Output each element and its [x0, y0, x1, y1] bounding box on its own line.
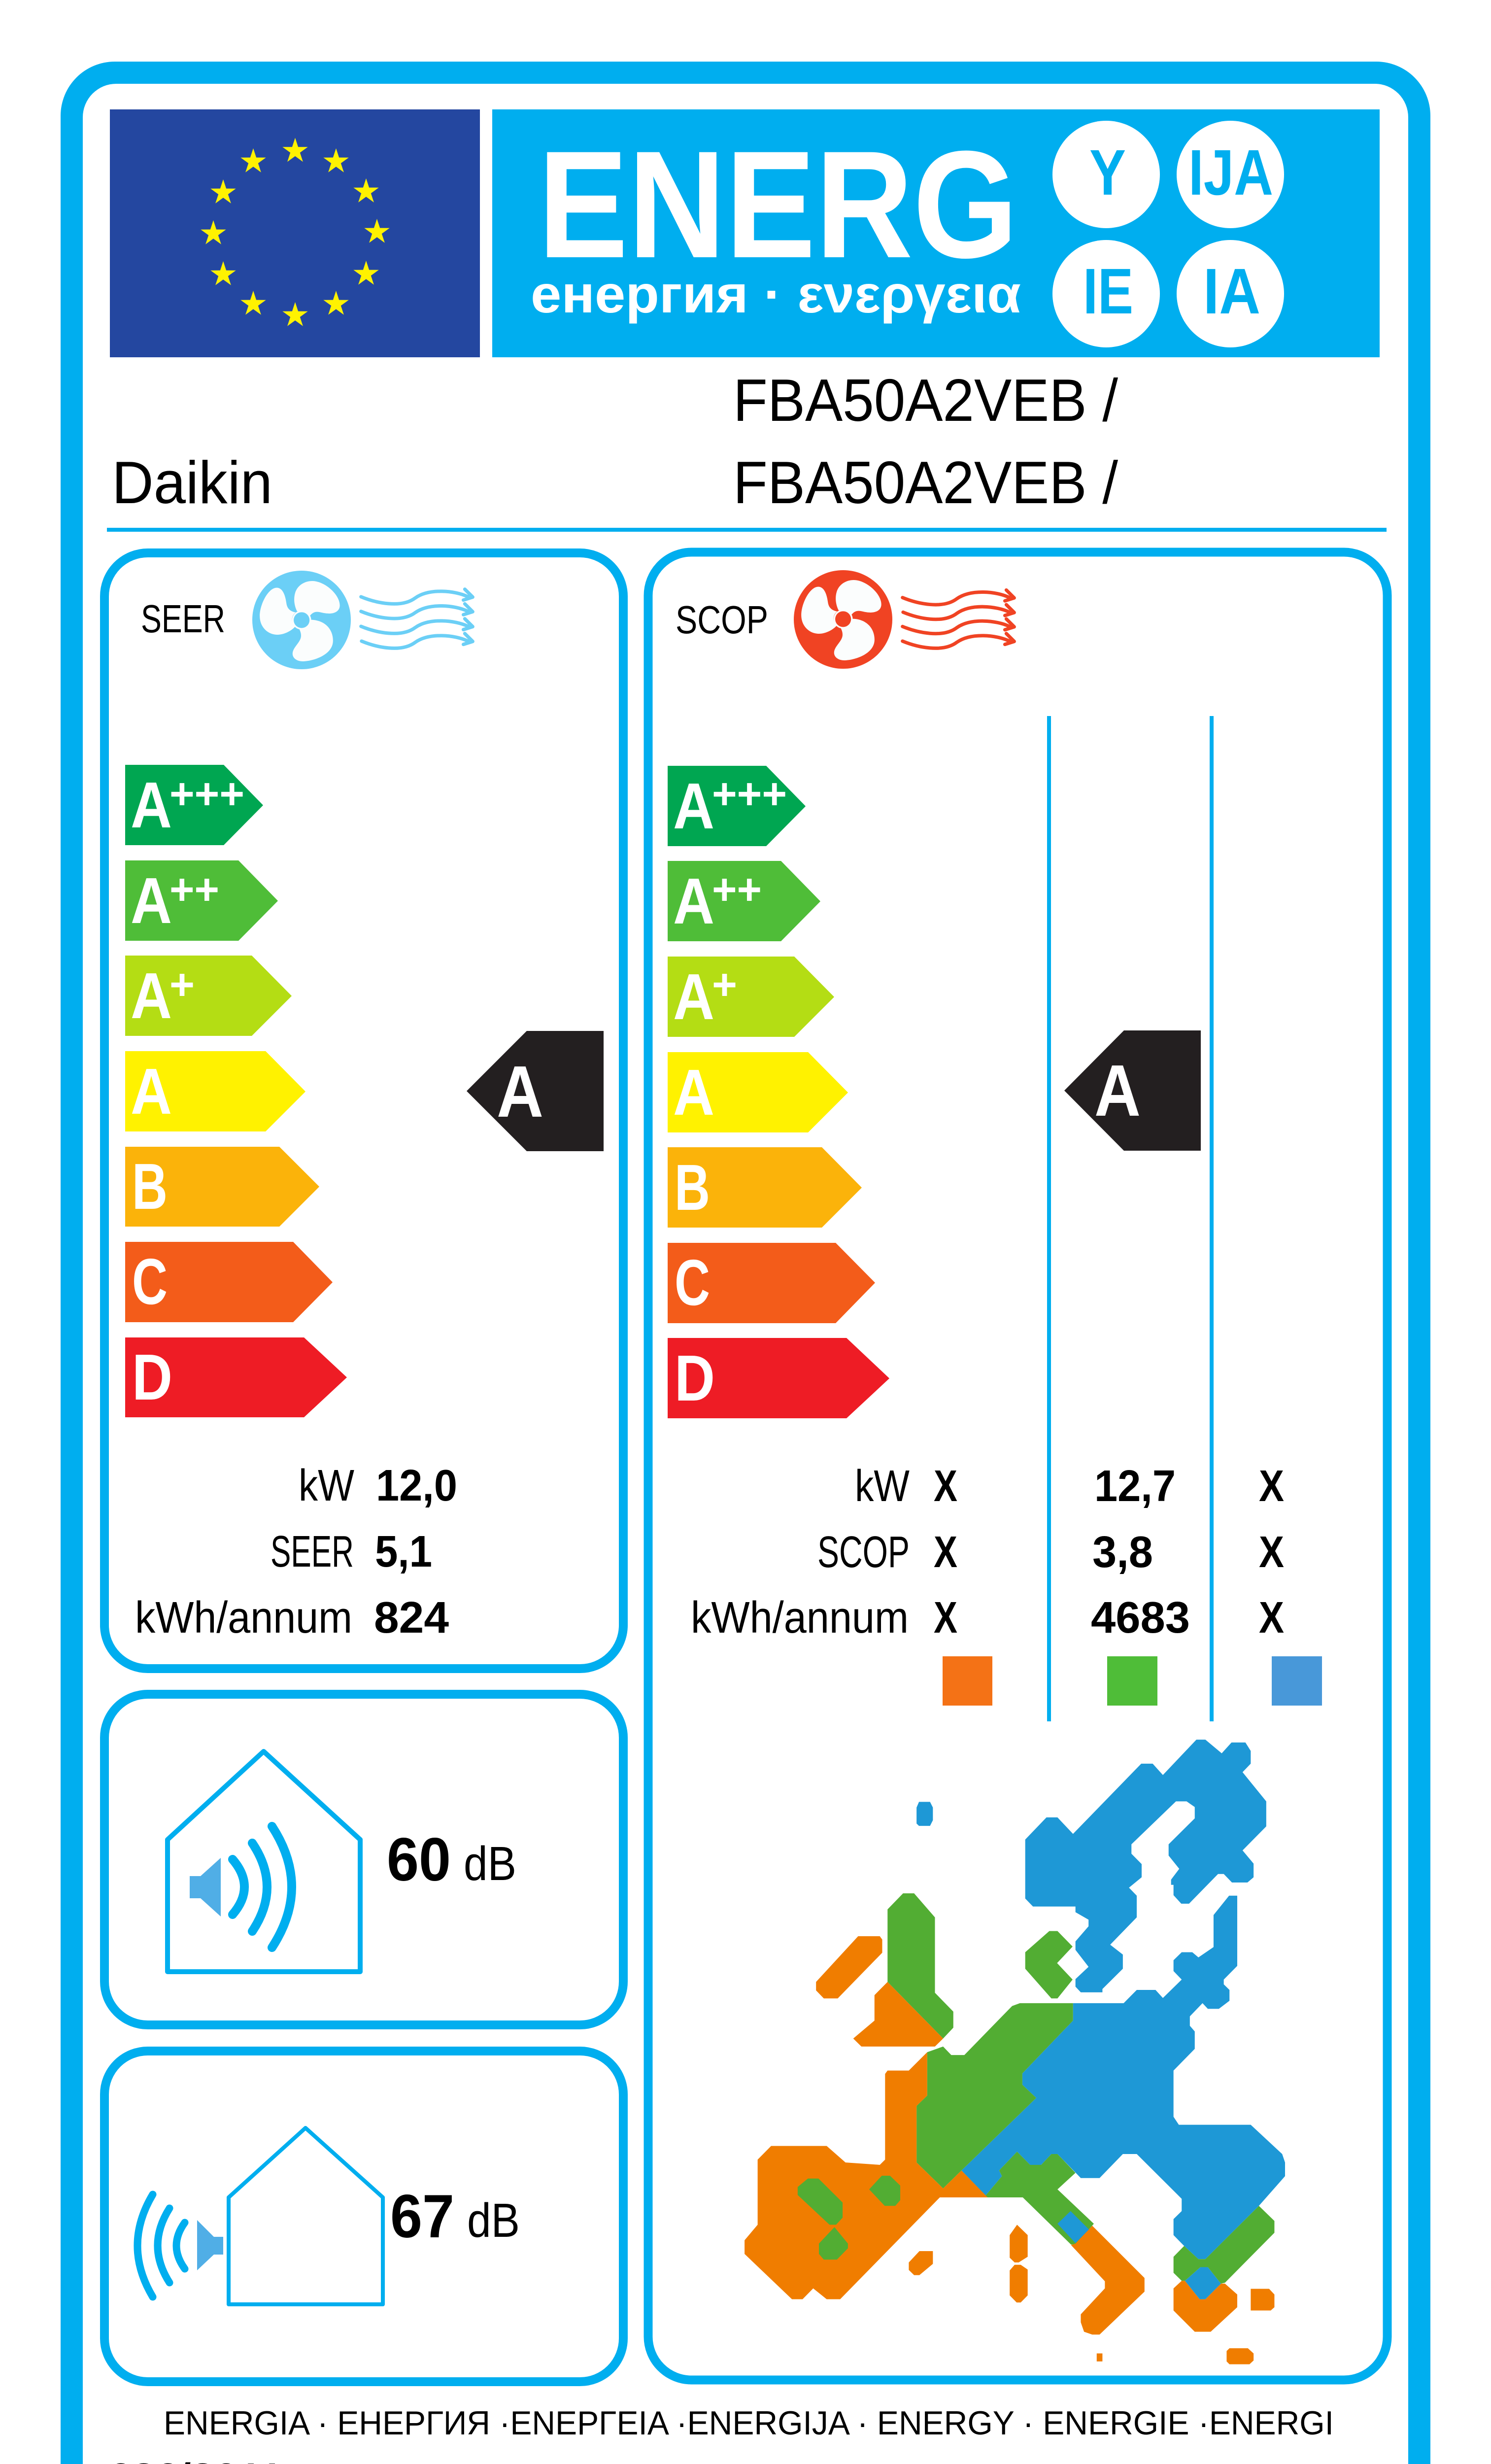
indoor noise value: 60	[387, 1826, 451, 1894]
outdoor noise value: 67	[390, 2183, 454, 2251]
footer: energy word in EU languages: ENERGIA · ЕНЕРГИЯ ·ΕΝΕΡΓΕΙΑ ·ENERGIJA · ENERGY · ENERGIE ·ENERGI	[164, 2404, 1334, 2442]
row: kW	[855, 1462, 1284, 1511]
rating arrow: SEER class A: A	[497, 1051, 543, 1132]
icon: speaker	[190, 1858, 221, 1916]
bar: A+++	[125, 765, 263, 845]
bar: C	[668, 1243, 875, 1323]
bar: C	[125, 1242, 333, 1322]
circle: Y	[1052, 121, 1160, 228]
row: SCOP	[817, 1528, 1284, 1577]
bar: A: A	[673, 1056, 714, 1129]
SCOP data table	[691, 1462, 1284, 1643]
bar: A+: A	[673, 960, 714, 1033]
row: kW: 12,0	[376, 1461, 457, 1510]
bar: D	[125, 1337, 347, 1417]
bar: B: B	[132, 1150, 168, 1223]
icon: warm air arrows	[903, 590, 1014, 648]
rating arrow: SCOP class A	[1064, 1030, 1201, 1151]
panel: outdoor noise	[104, 2051, 623, 2382]
outdoor noise value	[390, 2183, 520, 2251]
row: kW: X	[1259, 1462, 1284, 1511]
icon: sound waves	[137, 2194, 185, 2297]
circle: IJA	[1177, 121, 1284, 228]
row: kWh/annum	[691, 1593, 1284, 1643]
circle: IA: IA	[1203, 255, 1260, 327]
bar: B	[668, 1147, 862, 1228]
bar: A+++: +++	[712, 769, 787, 818]
rating arrow: SCOP class A: A	[1094, 1050, 1141, 1131]
bar: D: D	[675, 1342, 715, 1414]
bar: A+++: +++	[169, 769, 244, 818]
row: kWh/annum: kWh/annum	[691, 1593, 909, 1643]
row: SCOP: 3,8	[1092, 1528, 1153, 1577]
row: SCOP: X	[1259, 1528, 1284, 1577]
outdoor noise value: dB	[467, 2193, 520, 2247]
circle: IJA: IJA	[1188, 136, 1273, 208]
row: kWh/annum: X	[1259, 1593, 1284, 1643]
icon: cool air arrows	[361, 589, 473, 648]
row: kW	[299, 1461, 457, 1510]
model number line 2: FBA50A2VEB /	[733, 449, 1118, 516]
climate zone swatch: average	[1107, 1656, 1157, 1706]
row: kWh/annum: kWh/annum	[135, 1593, 352, 1643]
SEER heading: SEER	[141, 597, 225, 641]
bar: A: A	[131, 1055, 172, 1128]
icon: heating fan	[794, 570, 892, 669]
circle: IA	[1177, 240, 1284, 347]
supplier name: Daikin	[112, 449, 272, 516]
bar: A+++	[668, 766, 806, 846]
icon: cooling fan	[252, 571, 351, 669]
bar: A	[668, 1052, 848, 1132]
circle: IE: IE	[1083, 255, 1133, 327]
bar: B: B	[675, 1151, 710, 1224]
bar: A+	[668, 957, 834, 1037]
bar: A	[125, 1051, 305, 1131]
bar: D: D	[132, 1341, 172, 1413]
row: kW: kW	[299, 1461, 354, 1510]
bar: C: C	[675, 1246, 710, 1319]
bar: A+: +	[712, 960, 737, 1009]
bar: C: C	[132, 1245, 168, 1318]
row: SEER: SEER	[271, 1527, 354, 1576]
row: kW: 12,7	[1094, 1462, 1176, 1511]
icon: speaker	[197, 2220, 223, 2270]
bar: D	[668, 1338, 889, 1418]
icon: house outline	[229, 2128, 383, 2304]
row: SEER: 5,1	[375, 1527, 432, 1576]
model number line 1: FBA50A2VEB /	[733, 367, 1118, 434]
row: kWh/annum: 4683	[1091, 1593, 1190, 1643]
circle: IE	[1052, 240, 1160, 347]
row: kW: X	[934, 1462, 957, 1511]
bar: A++: ++	[169, 865, 219, 914]
panel: SEER cooling	[104, 553, 623, 1669]
row: kW: kW	[855, 1462, 910, 1511]
icon: house outline	[168, 1751, 360, 1972]
bar: A++: A	[131, 864, 172, 937]
SEER data table	[135, 1461, 457, 1643]
panel: SCOP heating	[648, 552, 1388, 2380]
bar: A++: A	[673, 865, 714, 937]
bar: B	[125, 1147, 319, 1227]
bar: A++: ++	[712, 865, 762, 914]
EU flag	[110, 109, 480, 357]
circle: Y: Y	[1089, 136, 1126, 208]
bar: A++	[125, 860, 278, 941]
bar: A+: +	[169, 960, 195, 1009]
rating arrow: SEER class A	[467, 1031, 604, 1151]
bar: A+++: A	[673, 770, 714, 842]
indoor noise value	[387, 1826, 516, 1894]
subtitle: energy in Cyrillic and Greek: енергия · ενεργεια	[531, 264, 1021, 324]
row: SCOP: X	[934, 1528, 957, 1577]
climate zone swatch: warmer	[943, 1656, 992, 1706]
indoor noise value: dB	[464, 1837, 516, 1890]
efficiency scale: SCOP	[668, 766, 889, 1418]
bar: A++	[668, 861, 820, 941]
row: SCOP: SCOP	[817, 1528, 910, 1577]
climate zone map of Europe	[745, 1740, 1285, 2364]
bar: A+++: A	[131, 769, 172, 841]
efficiency scale: SEER	[125, 765, 347, 1417]
bar: A+: A	[131, 959, 172, 1032]
panel: indoor noise	[104, 1694, 623, 2025]
climate zone swatch: colder	[1272, 1656, 1322, 1706]
SCOP heading: SCOP	[676, 598, 768, 642]
row: kWh/annum: X	[934, 1593, 957, 1643]
energy title banner	[492, 109, 1380, 357]
title: ENERG: ENERG	[538, 119, 1018, 290]
row: kWh/annum: 824	[374, 1593, 449, 1643]
bar: A+	[125, 956, 292, 1036]
icon: sound waves	[233, 1826, 292, 1948]
